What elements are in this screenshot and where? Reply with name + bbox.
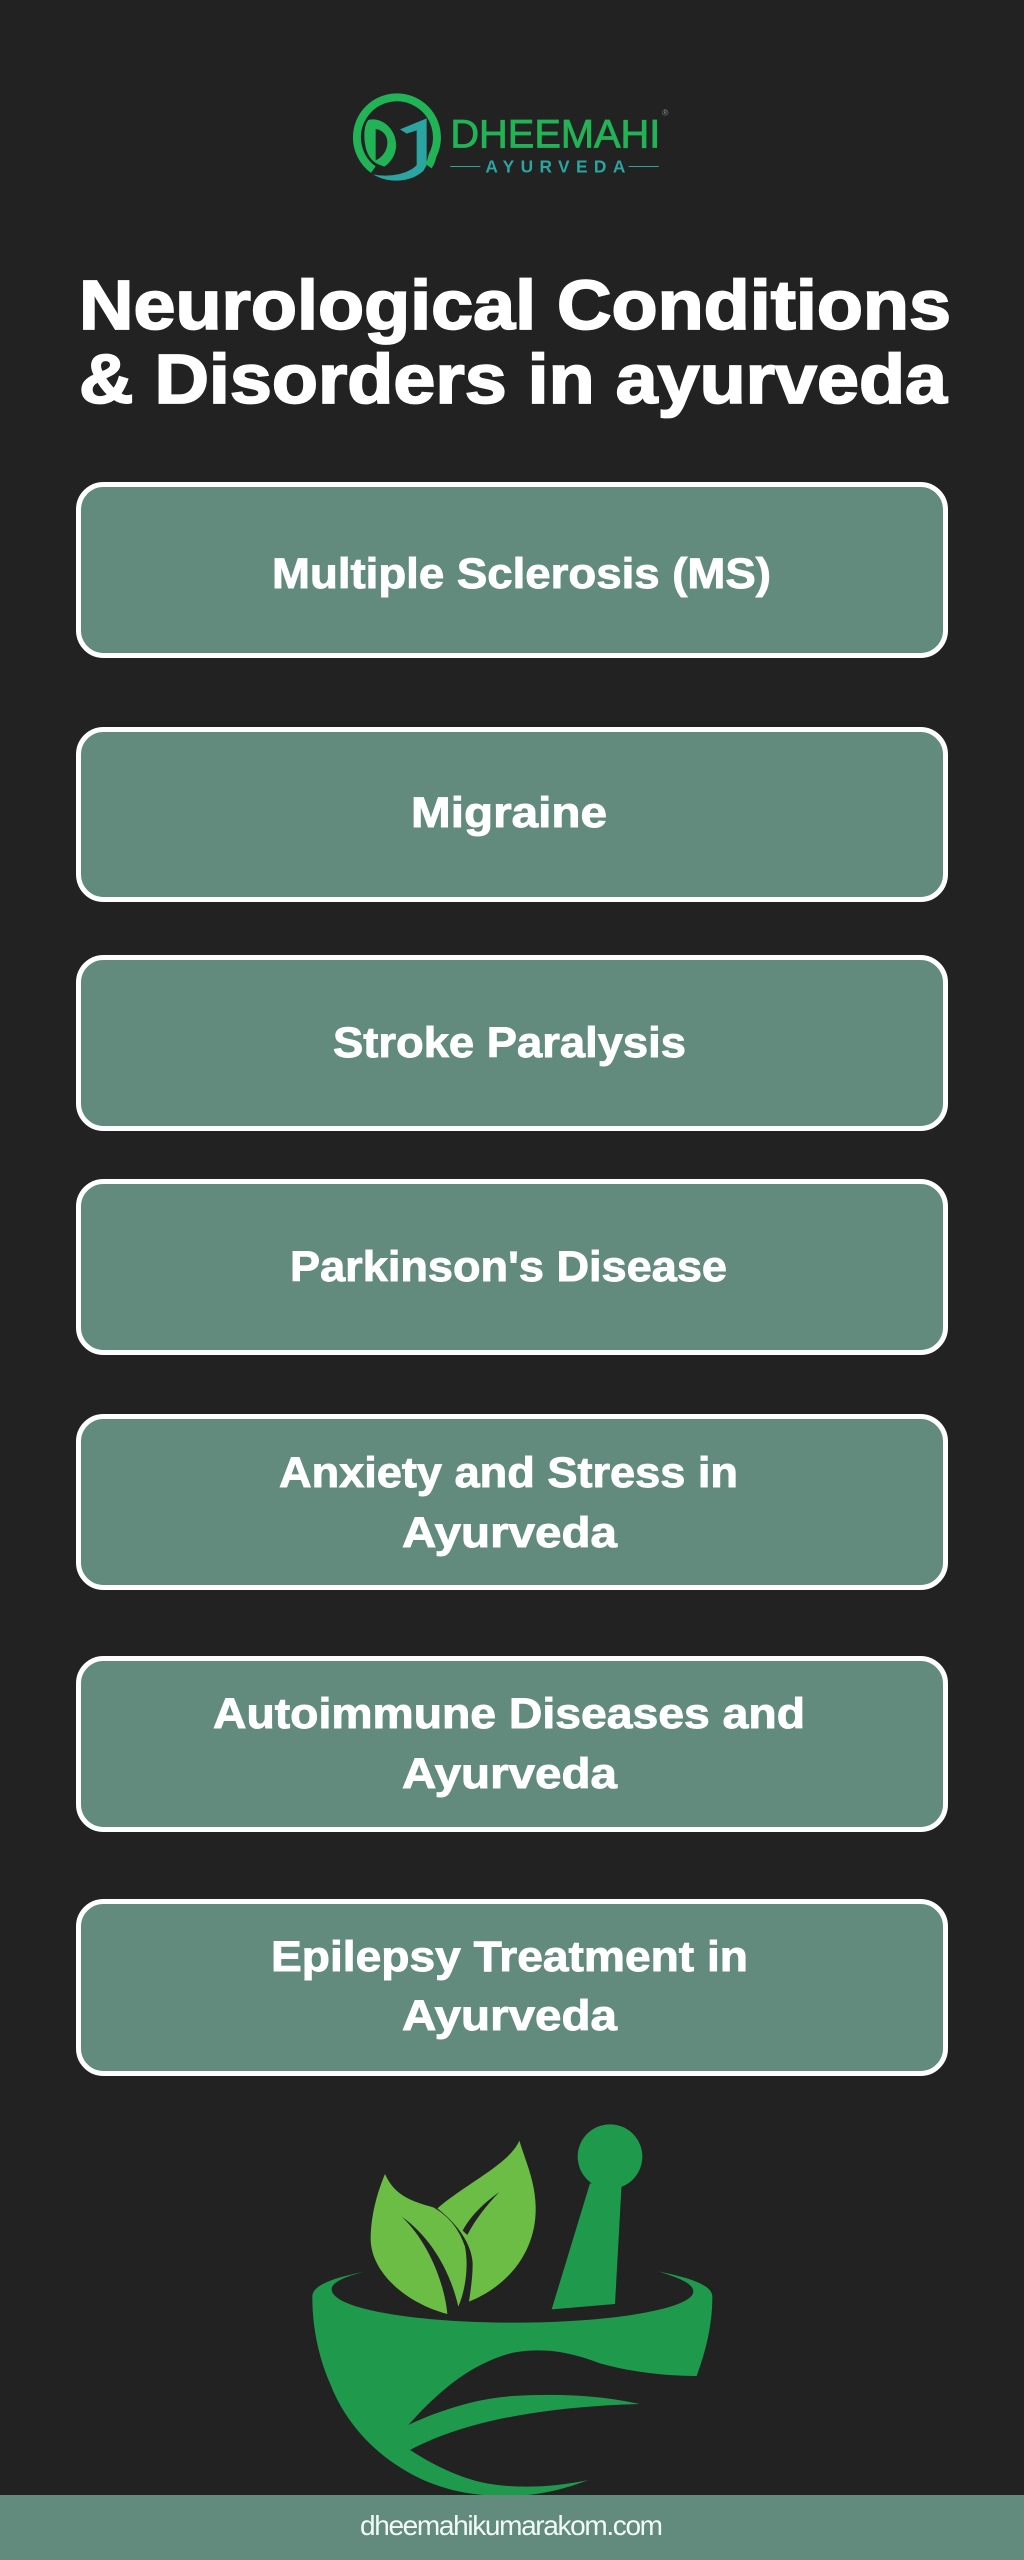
pestle (552, 2183, 622, 2309)
logo icon: DM monogram ring (357, 97, 437, 181)
title: & Disorders in ayurveda (79, 340, 948, 418)
logo wordmark: DHEEMAHI (450, 112, 660, 156)
panel: Stroke Paralysis (78, 958, 946, 1128)
panel: Epilepsy Treatment: Epilepsy Treatment in (271, 1933, 748, 1981)
title (79, 266, 951, 418)
panel: Autoimmune Diseases: Autoimmune Diseases and (213, 1690, 805, 1738)
panel: Anxiety and Stress (78, 1416, 946, 1588)
panel: Migraine: Migraine (411, 789, 607, 837)
right leaf (437, 2141, 536, 2302)
panel: Anxiety and Stress: Ayurveda (402, 1509, 618, 1557)
panel: Parkinson's Disease: Parkinson's Disease (290, 1243, 727, 1291)
icon: mortar, pestle and leaves (312, 2124, 712, 2496)
panel: Autoimmune Diseases (78, 1658, 946, 1830)
panel: Epilepsy Treatment: Ayurveda (402, 1992, 618, 2040)
left leaf (371, 2174, 467, 2314)
panel: Anxiety and Stress: Anxiety and Stress in (279, 1449, 738, 1497)
right leaf vein (463, 2192, 499, 2235)
logo tagline: AYURVEDA (485, 157, 626, 177)
panel: Epilepsy Treatment (78, 1902, 946, 2074)
panel: Stroke Paralysis: Stroke Paralysis (333, 1019, 686, 1067)
footer url: dheemahikumarakom.com (360, 2510, 663, 2541)
panel: Multiple Sclerosis: Multiple Sclerosis (MS) (272, 550, 771, 598)
logo: Dheemahi Ayurveda (357, 97, 669, 181)
registered mark: ® (662, 107, 669, 117)
mortar bowl (312, 2271, 712, 2496)
panel: Multiple Sclerosis (78, 484, 946, 656)
panel: Parkinson's Disease (78, 1182, 946, 1352)
footer bar (0, 2495, 1024, 2560)
panel: Migraine (78, 730, 946, 900)
panel: Autoimmune Diseases: Ayurveda (402, 1750, 618, 1798)
title: Neurological Conditions (79, 266, 951, 344)
